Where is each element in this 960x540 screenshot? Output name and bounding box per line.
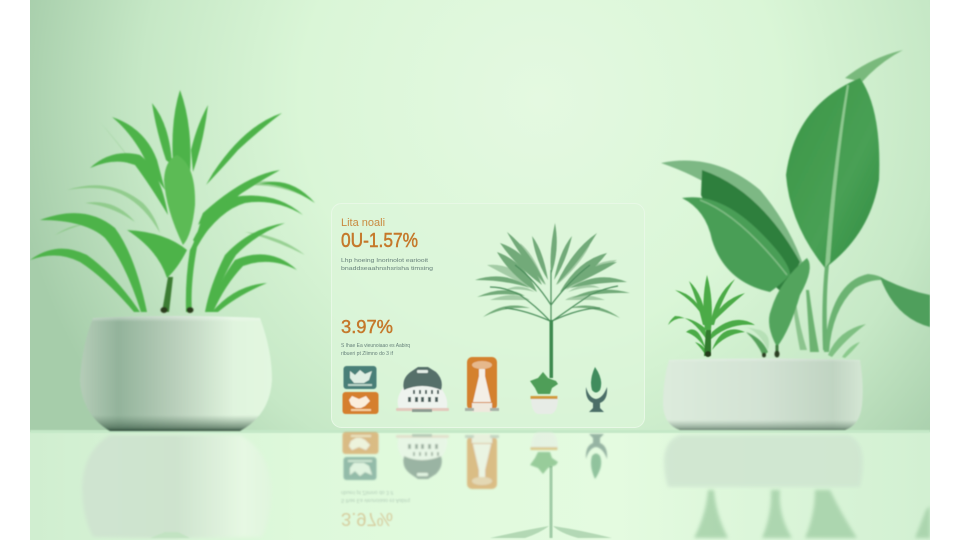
icon: grey bag	[396, 367, 449, 412]
white margin right	[930, 0, 960, 540]
icon: orange bottle panel	[465, 357, 499, 412]
icon: sprout emblem	[586, 367, 607, 412]
reflection: right plant stems	[694, 490, 930, 538]
reflection: tree	[490, 466, 612, 538]
reflection: card text	[341, 489, 410, 530]
card text: headings, percentages and captions	[341, 217, 433, 357]
right large-leaf plant	[661, 50, 930, 358]
reflection: card text: 3.97%	[341, 509, 393, 530]
icon: teal leaf badge	[344, 366, 376, 389]
right white pot	[663, 358, 863, 430]
icon: potted plant	[530, 372, 558, 414]
background wall	[30, 0, 930, 433]
reflection: left plant tips	[150, 532, 190, 538]
reflection: right pot	[664, 435, 863, 487]
left plant	[30, 90, 315, 313]
reflection: left pot	[82, 435, 271, 538]
reflection: card text: ribueri pt Zlimno do 3 if	[341, 489, 393, 495]
reflective floor	[30, 430, 930, 540]
panel: glass infographic card	[332, 204, 644, 428]
white margin left	[0, 0, 30, 540]
icon: orange leaf badge	[342, 392, 378, 414]
floor reflections	[82, 432, 930, 538]
left white pot	[80, 316, 272, 431]
small spiky plant in right pot	[668, 275, 755, 357]
illustration: green tree	[475, 223, 630, 378]
reflection: card text: S Ihae Ea vieunoiaao es Aabirq	[341, 497, 410, 503]
reflection: card icons	[342, 432, 607, 489]
